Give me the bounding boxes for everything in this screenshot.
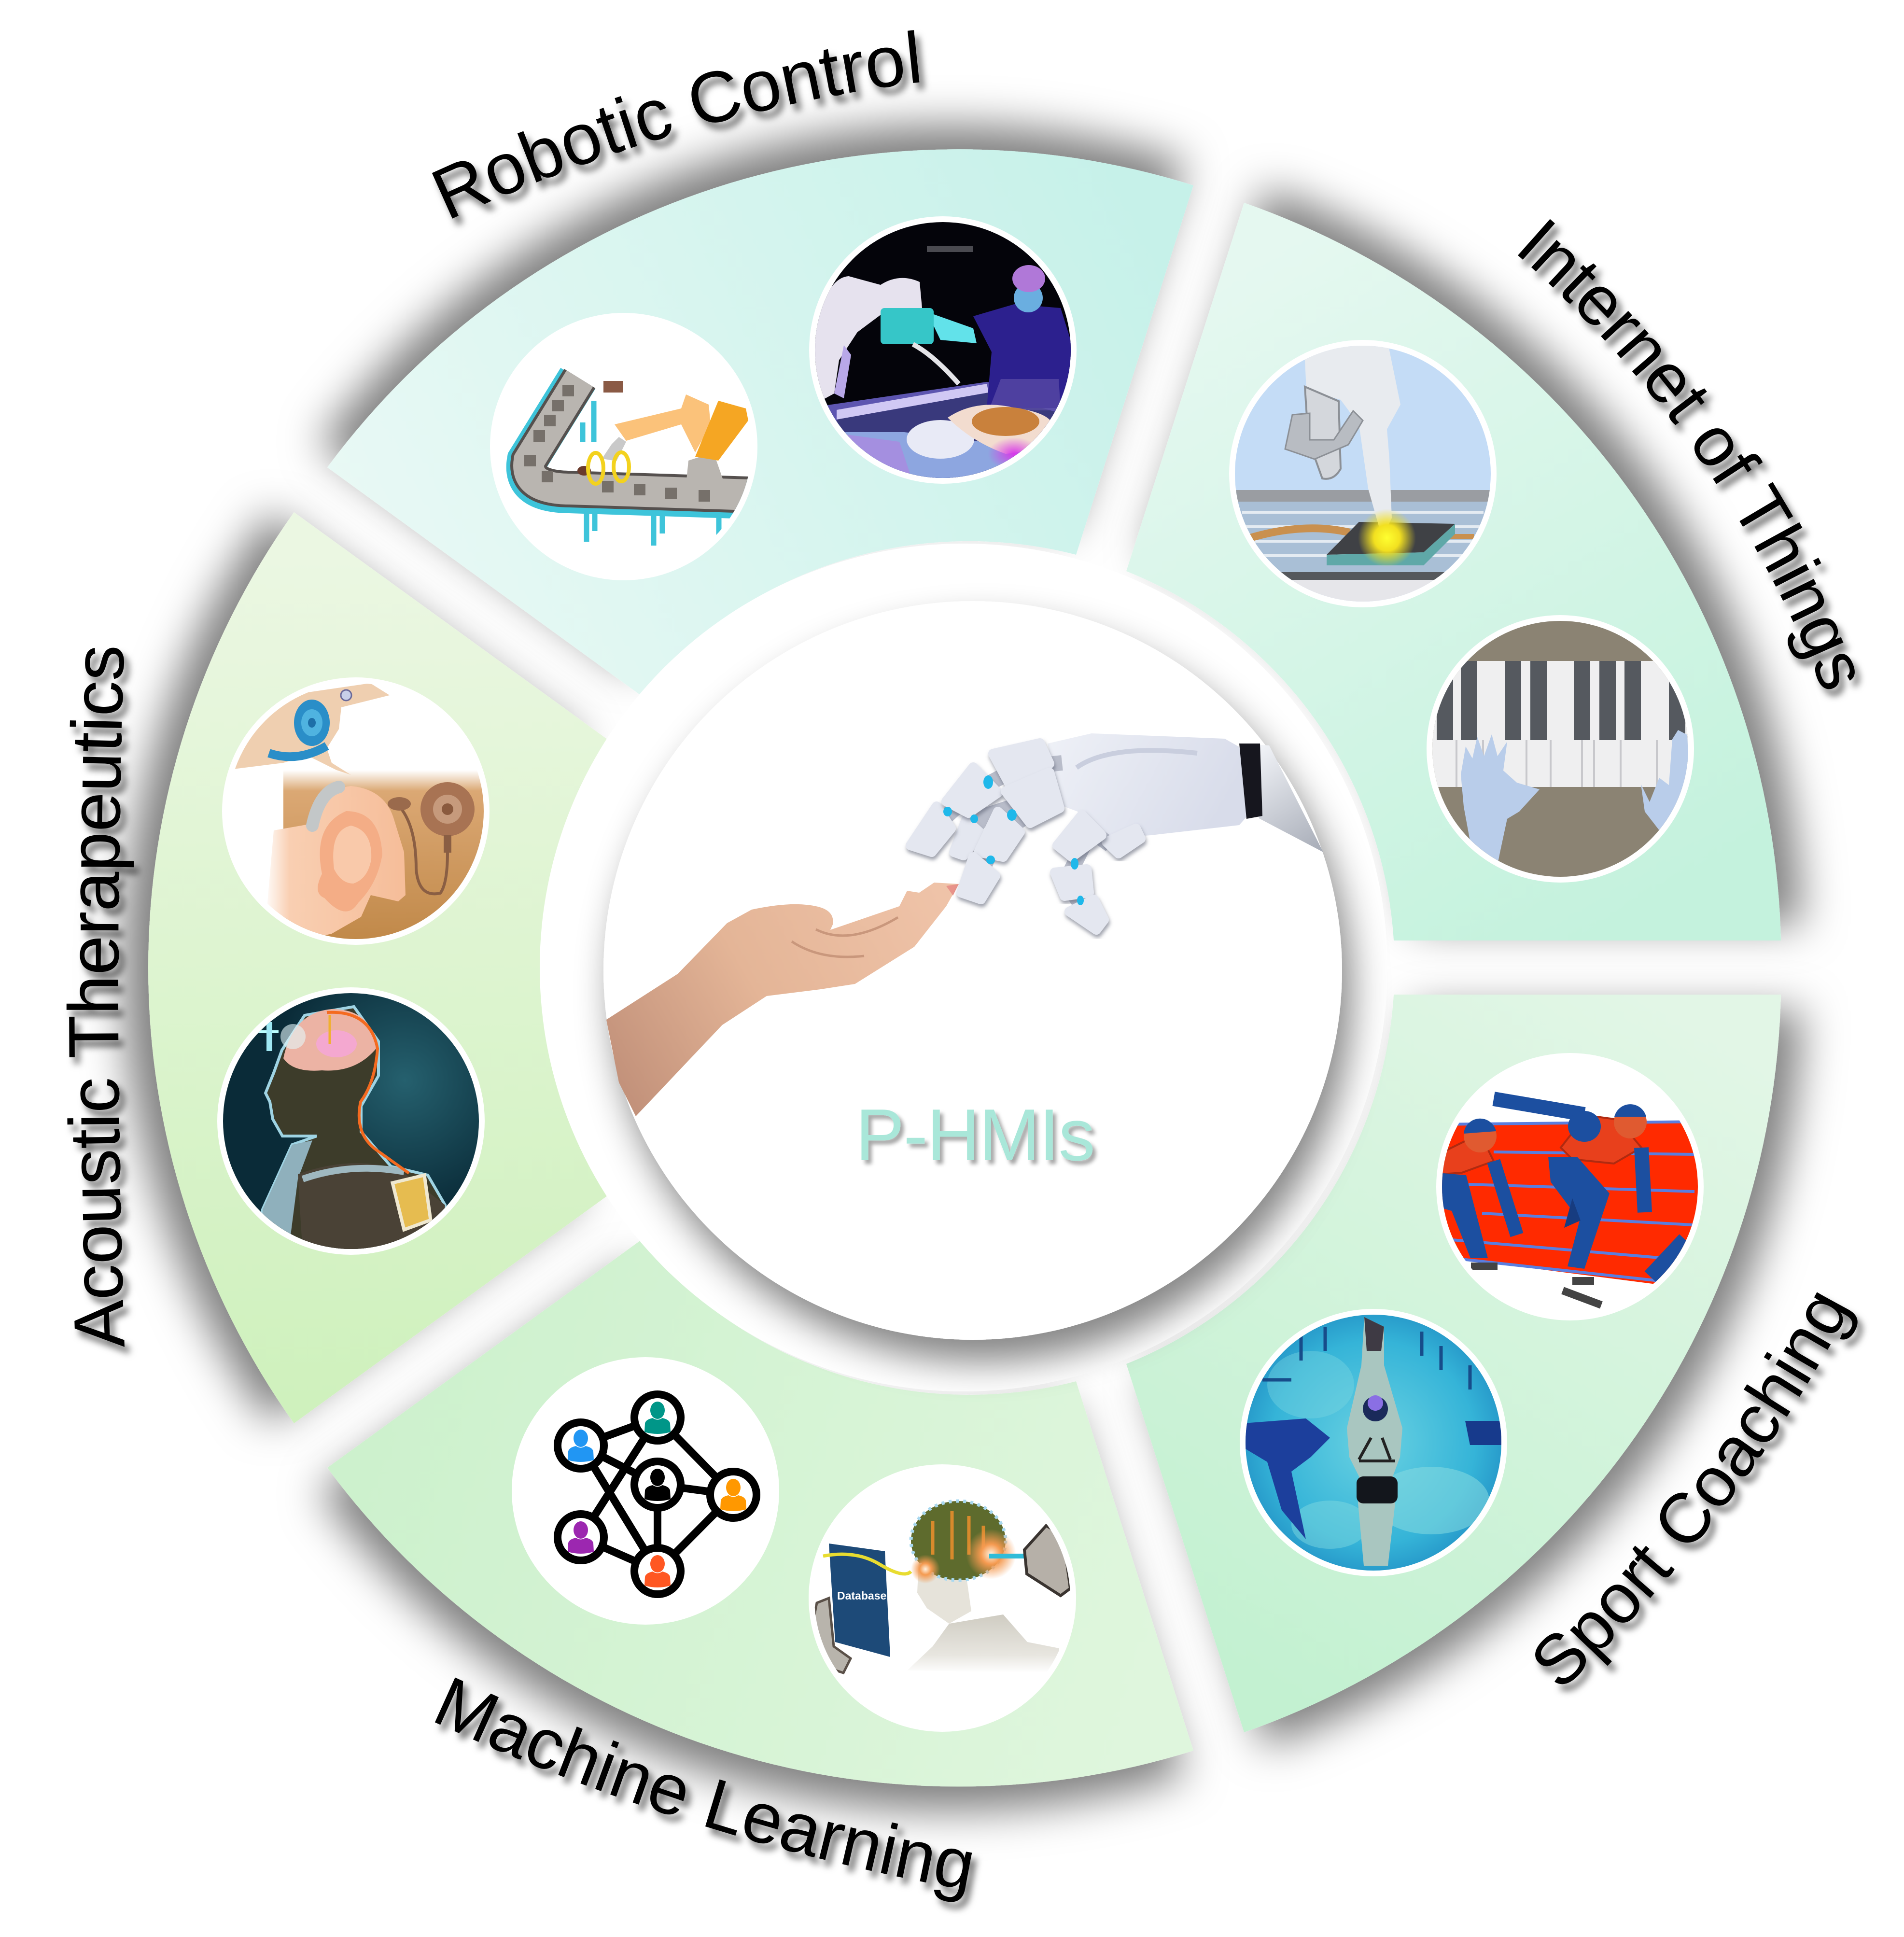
panel: machine learning [327, 1240, 1193, 1786]
panel: internet of things [1126, 203, 1781, 940]
photo: swimmer in pool [1238, 1307, 1509, 1578]
sector: internet of things background [1126, 203, 1781, 940]
panel: sport coaching [1126, 995, 1781, 1732]
photo: robot arm over conveyor [490, 313, 757, 580]
white ring between hub and sectors [540, 544, 1387, 1391]
label: Sport Coaching: Sport Coaching [1515, 1276, 1865, 1703]
label: Robotic Control: Robotic Control [432, 30, 929, 229]
panel: robotic control [327, 149, 1193, 695]
center circle: P-HMIs hub [603, 601, 1342, 1340]
sector: machine learning background [327, 1240, 1193, 1786]
photo: surgeon with KUKA robot [808, 215, 1078, 485]
photo: cochlear implant and ear [222, 677, 491, 945]
sector: sport coaching background [1126, 995, 1781, 1732]
photo: brain and neural implant [216, 986, 486, 1256]
photo: robot reading database [809, 1464, 1076, 1732]
sector: acoustic therapeutics background [148, 512, 608, 1423]
title: P-HMIs: P-HMIs [855, 1094, 1094, 1176]
sector: robotic control background [327, 149, 1193, 695]
panel: acoustic therapeutics [148, 512, 608, 1423]
icon: people network graph [512, 1357, 779, 1625]
illustration: human hand [606, 883, 959, 1116]
photo: speed skaters [1435, 1053, 1705, 1320]
text: database book label: Database [837, 1589, 886, 1602]
label: Machine Learning: Machine Learning [423, 1661, 981, 1906]
photo: robot finger pressing sensor on keyboard [1228, 338, 1498, 609]
illustration: robot hand [910, 733, 1323, 930]
label: Internet of Things: Internet of Things [1503, 203, 1884, 700]
photo: virtual piano with hands [1425, 614, 1695, 884]
label: Acoustic Therapeutics: Acoustic Therapeutics [54, 644, 140, 1349]
